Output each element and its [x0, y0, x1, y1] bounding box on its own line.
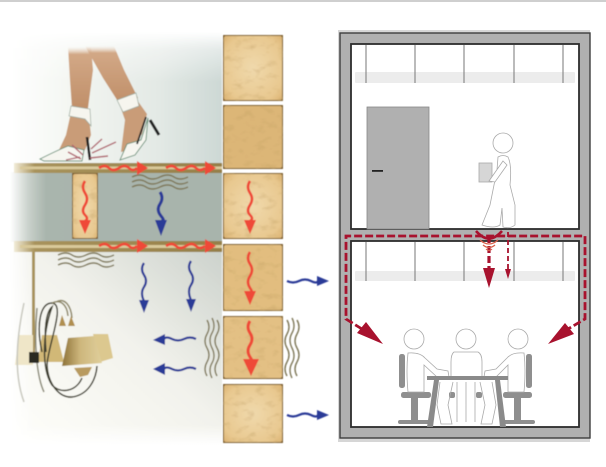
sound waves — [58, 175, 299, 378]
lower room — [351, 241, 579, 427]
people — [404, 329, 528, 424]
floor cavity — [10, 172, 222, 242]
lower room background — [10, 250, 222, 445]
impact arcs — [476, 231, 502, 238]
suspended ceiling — [355, 72, 575, 83]
concrete outer shell — [338, 30, 590, 442]
sound arrows in blue — [139, 192, 329, 420]
arrowheads — [357, 268, 574, 344]
icon: door — [367, 107, 429, 229]
icon: chandelier — [15, 252, 113, 402]
icon: person carrying box — [479, 133, 515, 228]
ceiling slab — [14, 241, 222, 252]
suspended ceiling — [355, 271, 575, 281]
icon: walking legs in high heels — [40, 46, 159, 161]
upper room — [351, 44, 579, 229]
icon: impact lines — [66, 139, 116, 160]
meeting table with three people — [398, 329, 535, 427]
panel: wood structure section — [10, 32, 329, 445]
vibration arrows in red — [79, 161, 259, 376]
panel: building section diagram — [338, 30, 590, 442]
chairs — [398, 354, 535, 424]
table — [427, 376, 508, 427]
upper room background — [10, 32, 222, 164]
upper floor slab — [14, 163, 222, 173]
wood blocks column — [72, 35, 283, 443]
dashed sound path in crimson — [346, 231, 585, 329]
top page rule — [0, 0, 606, 2]
